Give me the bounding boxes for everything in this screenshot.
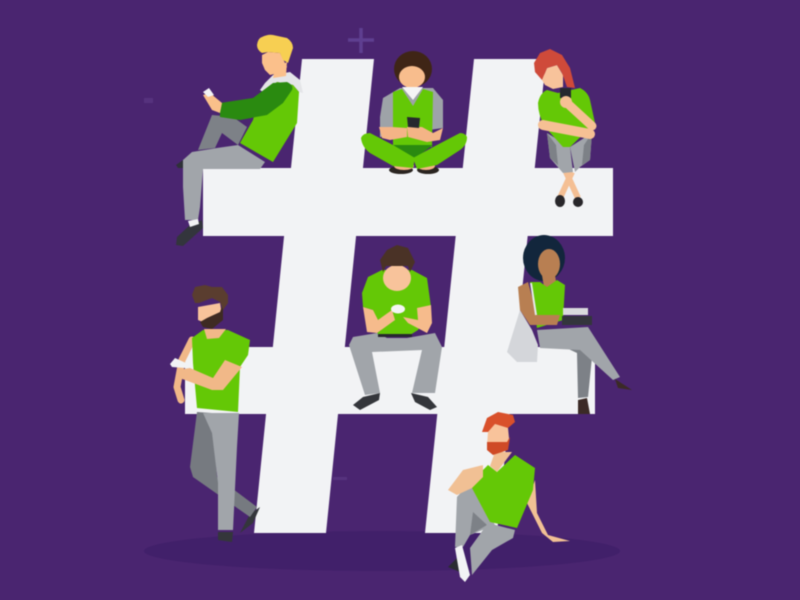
person: man sitting on the middle bar bbox=[349, 245, 442, 410]
decorative dash lower bbox=[333, 477, 347, 480]
decorative dash left bbox=[144, 98, 153, 103]
person: woman with bag and tablet bbox=[507, 235, 632, 414]
decorative plus sign bbox=[348, 28, 374, 53]
person: bearded man standing bbox=[170, 285, 260, 542]
person: red-haired woman bbox=[534, 49, 595, 207]
ground shadow bbox=[144, 531, 620, 571]
hashtag symbol bbox=[185, 59, 613, 533]
person: red-bearded man sitting on the ground bbox=[448, 412, 570, 582]
person: cross-legged with phone bbox=[361, 51, 467, 174]
person: blond man sitting on top-left bbox=[176, 35, 303, 246]
